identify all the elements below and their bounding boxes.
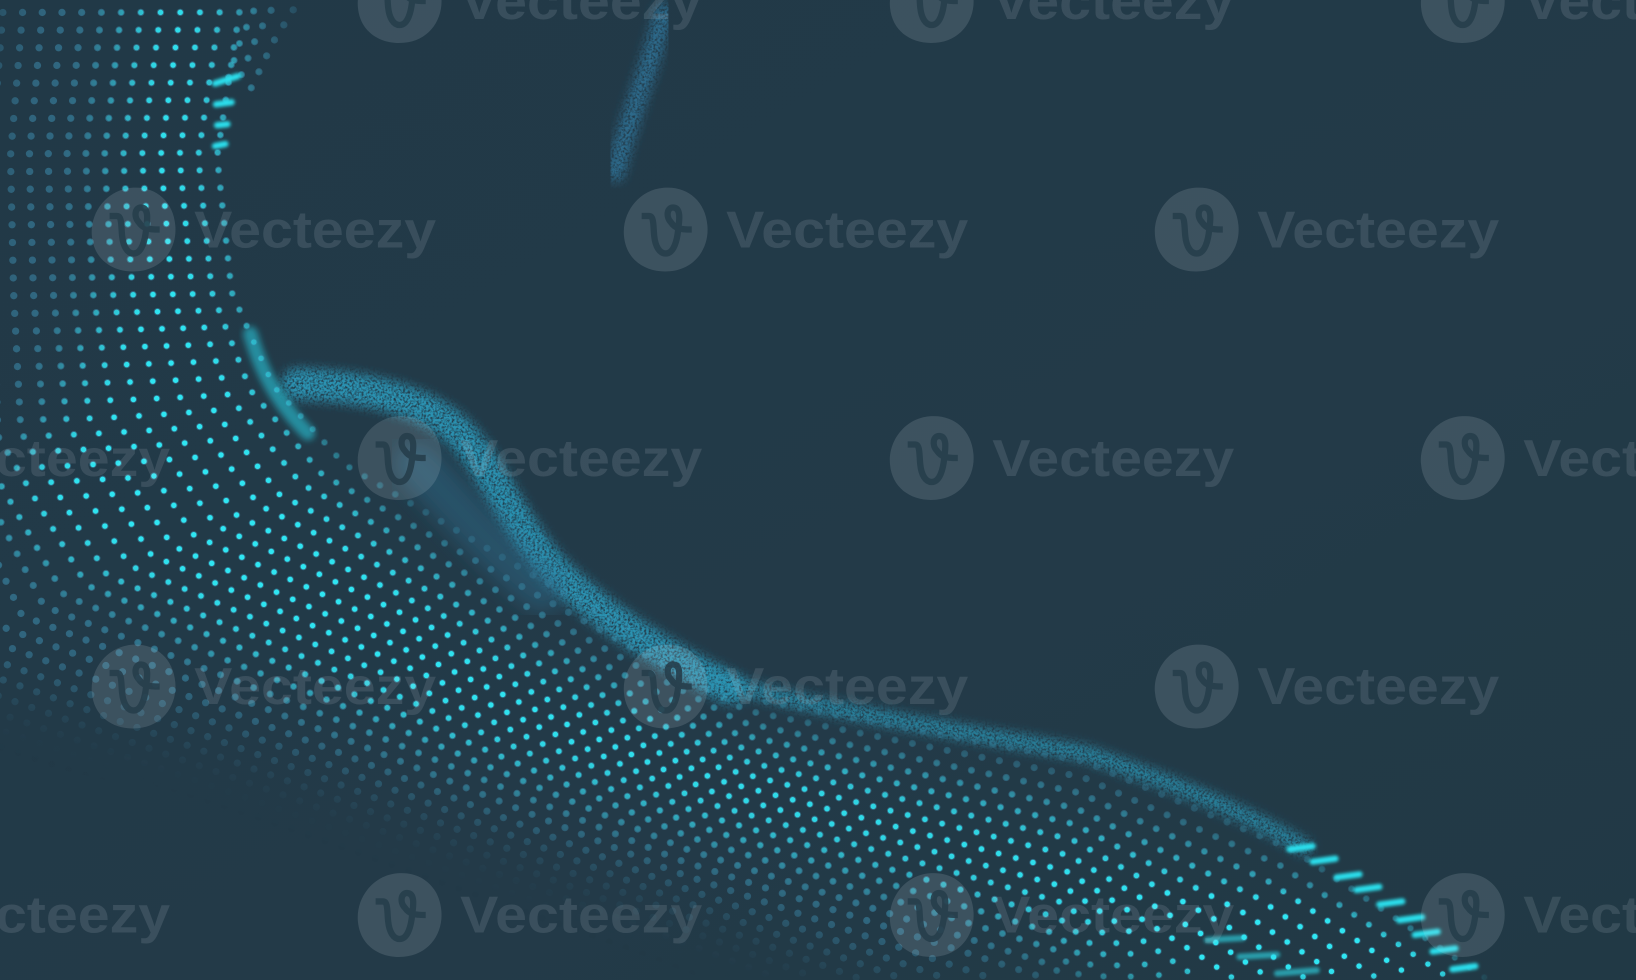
watermark row 5: Vecteezy xyxy=(992,887,1234,945)
watermark row 4 xyxy=(92,645,1499,728)
watermark row 2 xyxy=(92,188,1499,271)
watermark row 3 xyxy=(0,416,1636,500)
blurred streak: top centre xyxy=(616,13,664,172)
watermark row 4: Vecteezy xyxy=(1257,658,1499,716)
watermark row 3: Vecteezy xyxy=(460,430,702,488)
watermark row 1 xyxy=(358,0,1636,43)
watermark row 5: Vecteezy xyxy=(460,887,702,945)
watermark row 4: Vecteezy xyxy=(194,658,436,716)
watermark row 2: Vecteezy xyxy=(1257,201,1499,259)
watermark row 3: Vecteezy xyxy=(992,430,1234,488)
watermark row 4: Vecteezy xyxy=(726,658,968,716)
watermark row 2: Vecteezy xyxy=(726,201,968,259)
watermark row 5 xyxy=(0,873,1636,957)
blurred ridge band xyxy=(250,334,1304,847)
watermark row 2: Vecteezy xyxy=(194,201,436,259)
bright edge streaks xyxy=(215,76,1475,973)
